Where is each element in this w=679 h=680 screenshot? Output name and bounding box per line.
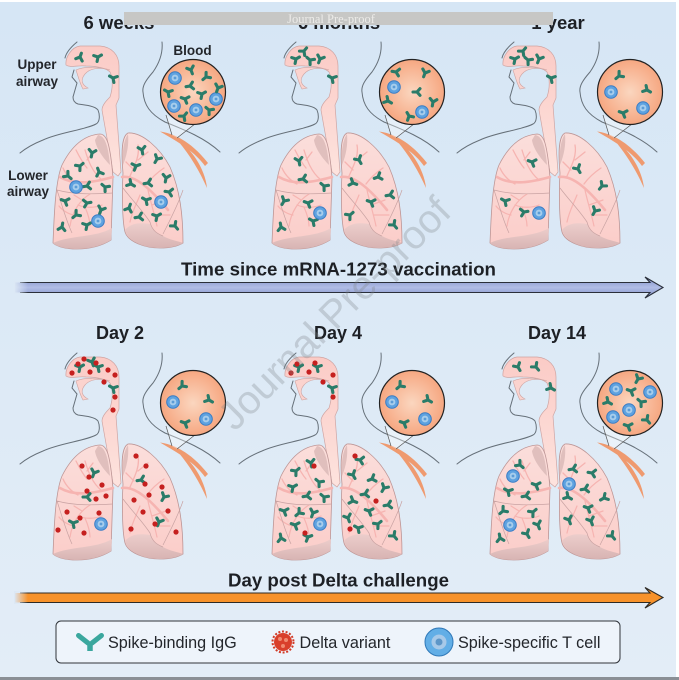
legend icon: T cell [425,628,453,656]
panel: Day 4 [239,353,444,560]
axis title: time since vaccination: Time since mRNA-1273 vaccination [181,258,496,280]
IgG antibodies [277,46,399,231]
T cell [533,207,545,219]
Delta variant particles [55,356,179,536]
legend text: Delta variant: Delta variant [300,634,391,652]
lungs, airway and blood sample outline [20,42,226,249]
IgG antibodies [58,52,180,231]
IgG antibodies [500,46,607,216]
blood contents [605,71,652,117]
heading: Day 2: Day 2 [96,323,144,343]
panel: 6 weeks [20,42,226,249]
lungs, airway and blood sample outline [20,353,226,560]
IgG antibodies [277,362,399,542]
Delta variant particles [288,360,379,536]
T cell [314,207,326,219]
legend text: T cell: Spike-specific T cell [458,634,600,652]
blood contents [384,68,437,120]
panel: 6 months [239,42,444,249]
panel: 1 year [457,42,662,249]
heading: Day 14: Day 14 [528,323,586,343]
IgG antibodies [496,363,617,542]
blood contents [163,66,222,120]
label: Upper airway: Upper [17,57,57,72]
T cell [314,518,326,530]
heading: Day 4: Day 4 [314,323,362,343]
IgG antibodies [68,358,168,527]
label: Lower airway: Lower [8,168,49,183]
blood contents [167,381,214,427]
legend text: IgG: Spike-binding IgG [108,634,237,652]
heading: 6 weeks: 6 weeks [84,12,154,33]
panel: Day 2 [20,353,226,560]
lungs, airway and blood sample outline [239,42,444,249]
blood contents [604,375,656,430]
legend icon: IgG [78,636,102,651]
label: Upper airway: airway [16,74,59,89]
T cells [70,181,167,227]
blood contents [386,381,433,427]
T cell [95,518,107,530]
label: Lower airway: airway [7,184,50,199]
arrow: time since vaccination [14,277,663,298]
axis title: day post Delta challenge: Day post Delta challenge [228,570,449,590]
heading: 6 months: 6 months [298,12,380,33]
lungs, airway and blood sample outline [457,42,662,249]
legend icon: Delta variant [272,632,294,652]
watermark: Journal Pre-proof [210,188,460,439]
arrow: day post Delta challenge [14,588,663,608]
legend [56,621,620,663]
heading: 1 year: 1 year [531,12,585,33]
T cells [504,470,575,531]
panel: Day 14 [457,353,662,560]
lungs, airway and blood sample outline [239,353,444,560]
journal pre-proof banner: Journal Pre-proof [287,12,376,26]
journal pre-proof banner [124,12,553,26]
lungs, airway and blood sample outline [457,353,662,560]
label: Blood: Blood [173,43,212,58]
bottom edge strip [0,677,679,680]
